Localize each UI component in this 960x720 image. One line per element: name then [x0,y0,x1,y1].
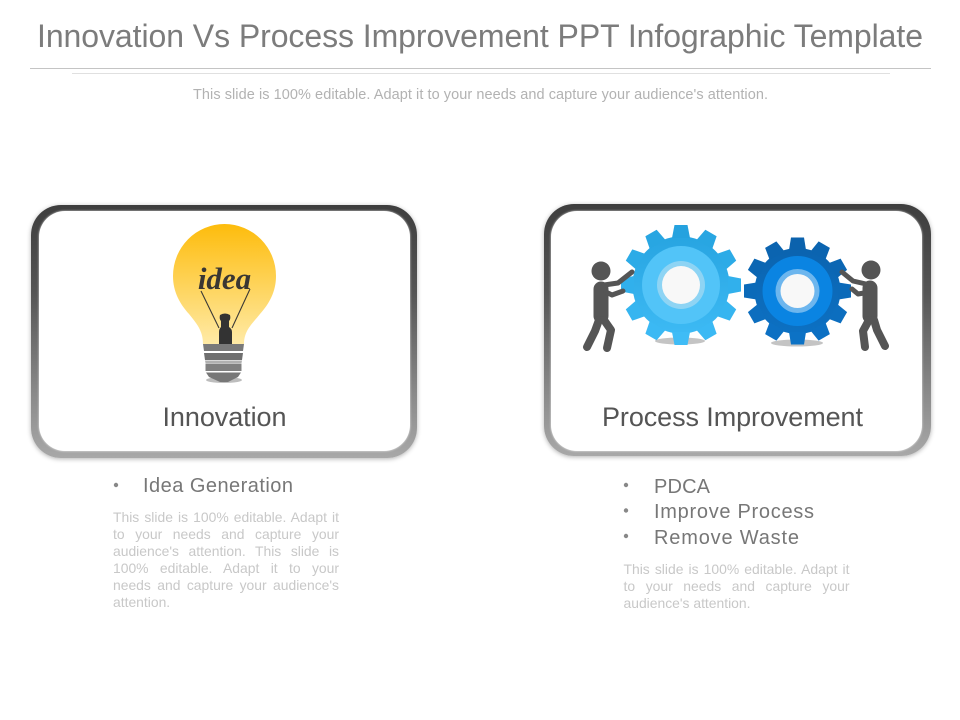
panel heading: Innovation: Innovation [162,402,286,432]
panel heading: Process Improvement: Process Improvement [602,402,863,432]
body text: process improvement: to your needs and capture your [624,578,850,594]
dark blue gear [744,238,851,344]
icon: idea light bulb [173,224,276,383]
panel frame: process improvement [544,204,931,456]
bullet list: process improvement [624,476,814,549]
bullet list: process improvement: PDCA [654,476,711,498]
subtitle: This slide is 100% editable. Adapt it to your needs and capture your audience's attention. [193,87,768,103]
body text: process improvement: This slide is 100% editable. Adapt it [624,561,850,577]
filament stem [219,314,232,344]
body text: innovation: needs and capture your audience's [113,577,339,593]
body text: innovation: audience's attention. This slide is [113,543,339,559]
body text: innovation: to your needs and capture your [113,526,339,542]
light blue gear [621,225,741,345]
panel frame: innovation [31,205,417,458]
right figure [842,260,885,347]
icon: people pushing gears [587,225,885,348]
title: Innovation Vs Process Improvement PPT Infographic Template [37,18,923,54]
body text: process improvement [624,561,850,611]
header rules [30,68,931,74]
body text: innovation: 100% editable. Adapt it to your [113,560,339,576]
gear shadows [655,338,823,346]
bullet list: innovation: Idea Generation [143,475,293,497]
bullet list: process improvement: Improve Process [654,501,814,523]
left figure [587,262,632,348]
idea label: idea [198,261,251,296]
filament wires [201,289,250,328]
bulb screw base [203,344,244,382]
body text: innovation: attention. [113,594,170,610]
body text: process improvement: audience's attention. [624,595,750,611]
bullet list: process improvement: Remove Waste [654,527,799,549]
body text: innovation [113,509,339,610]
body text: innovation: This slide is 100% editable. Adapt it [113,509,339,525]
